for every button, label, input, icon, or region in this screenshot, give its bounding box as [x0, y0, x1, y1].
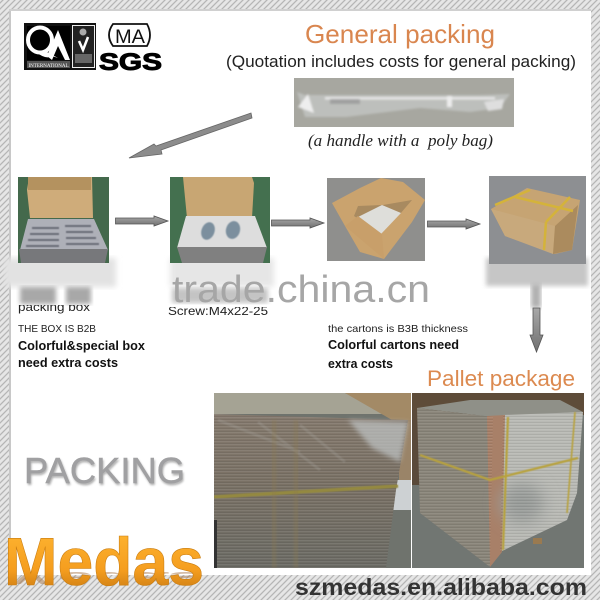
text block: carton note [328, 323, 468, 371]
heading: Pallet package: Pallet package [427, 366, 575, 391]
photo: open carton [327, 178, 425, 261]
text block: inner box note: Colorful&special box [18, 339, 145, 353]
logo: CMA: MA [115, 27, 145, 48]
watermark: trade.china.cn: trade.china.cn [172, 269, 430, 311]
text block: carton note: Colorful cartons need [328, 338, 459, 352]
photo: sealed carton [489, 176, 586, 264]
arrow: step 3 to 4 [428, 219, 480, 229]
arrow: step 1 to 2 [116, 216, 168, 226]
reflection of Medas logo: Medas [4, 568, 204, 588]
website url: szmedas.en.alibaba.com [295, 574, 587, 600]
arrow: down to pallet [530, 308, 543, 352]
label: PACKING: PACKING [25, 452, 186, 493]
text block: carton note: the cartons is B3B thickness [328, 323, 468, 335]
photo: inner box with screws [170, 177, 270, 263]
arrow: step 2 to 3 [272, 218, 324, 228]
text block: inner box note [18, 323, 145, 370]
partly hidden caption: packing box: packing box [18, 300, 90, 314]
text block: carton note: extra costs [328, 357, 393, 371]
logo: SGS: SGS [99, 49, 162, 76]
title: General packing: General packing [305, 19, 495, 49]
caption: a handle with a poly bag: (a handle with a poly bag) [308, 131, 493, 150]
photo: left pallet [214, 393, 411, 568]
label: PACKING: PACKING [24, 450, 185, 491]
arrow: diagonal to first box [129, 113, 252, 158]
partly hidden caption: screw size: Screw:M4x22-25 [168, 304, 268, 318]
text block: inner box note: THE BOX IS B2B [18, 323, 96, 335]
subtitle: quotation note: (Quotation includes costs for general packing) [226, 53, 576, 71]
logo: Medas: Medas [4, 524, 204, 600]
blurred-out captions [4, 258, 588, 308]
text block: inner box note: need extra costs [18, 356, 118, 370]
photo: right pallet [412, 393, 584, 568]
certification logos [24, 23, 162, 76]
photo: inner box with handles [18, 177, 109, 263]
photo: handle in poly bag [294, 78, 514, 127]
logo: QA International: INTERNATIONAL [28, 64, 68, 69]
